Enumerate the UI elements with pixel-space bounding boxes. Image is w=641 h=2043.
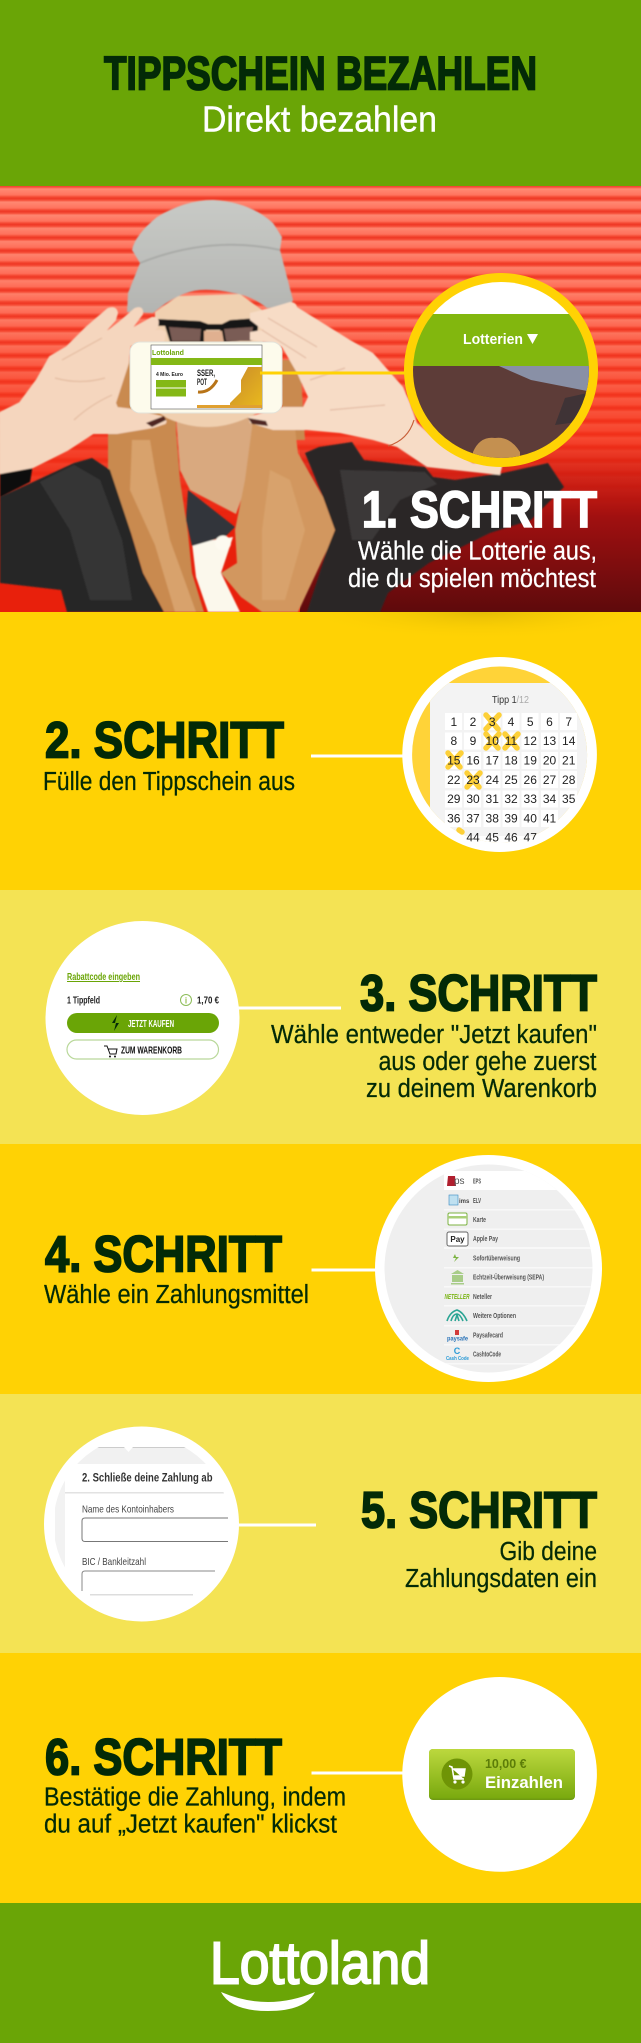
selected number crosses	[448, 715, 518, 832]
hair back	[108, 360, 305, 612]
calendar numbers: 41	[543, 812, 556, 826]
band notch	[124, 1447, 133, 1452]
calendar numbers: 31	[486, 792, 499, 806]
calendar numbers: 39	[504, 812, 518, 826]
calendar numbers: 45	[486, 830, 499, 844]
calendar numbers: 7	[565, 715, 572, 729]
calendar numbers: 9	[470, 734, 477, 748]
icon: paysafe	[447, 1330, 469, 1342]
calendar numbers: 6	[546, 715, 553, 729]
phone hero text: SSER,	[197, 368, 215, 378]
calendar numbers: 4	[508, 715, 515, 729]
buy button	[67, 1013, 219, 1033]
beanie	[127, 200, 293, 313]
row labels: CashtoCode	[473, 1350, 501, 1358]
icon: eps	[447, 1176, 465, 1187]
calendar numbers: 28	[562, 773, 576, 787]
calendar numbers: 22	[447, 773, 461, 787]
calendar numbers: 35	[562, 792, 576, 806]
calendar numbers: 16	[466, 754, 480, 768]
row labels: Paysafecard	[473, 1330, 503, 1340]
panel: step 3	[0, 890, 641, 1144]
divider	[65, 1492, 230, 1494]
row labels: EPS	[473, 1176, 481, 1186]
panel: header	[0, 0, 641, 186]
jacket right	[305, 442, 564, 612]
calendar numbers: 38	[486, 812, 499, 826]
phone hero swoosh	[198, 380, 217, 392]
step 3 text	[271, 1021, 597, 1103]
panel: step 4	[0, 1144, 641, 1394]
magnifier label: Lotterien	[463, 331, 523, 348]
phone	[130, 342, 282, 413]
calendar numbers	[447, 715, 576, 844]
line item: 1 Tippfeld	[67, 996, 100, 1006]
discount link: Rabattcode eingeben	[67, 972, 140, 983]
icon: paysafe: paysafe	[447, 1336, 469, 1342]
calendar numbers: 24	[486, 773, 499, 787]
button	[215, 536, 231, 550]
panel: step 5	[0, 1394, 641, 1653]
checkout circle	[46, 921, 240, 1115]
neck and chest	[176, 415, 258, 514]
calendar numbers: 19	[524, 754, 537, 768]
amount: 10,00 €	[485, 1756, 526, 1771]
calendar numbers: 15	[447, 754, 461, 768]
icon: sofort bolt	[453, 1254, 459, 1262]
calendar numbers: 37	[466, 812, 480, 826]
calendar numbers: 33	[524, 792, 537, 806]
magnifier arrow	[527, 334, 538, 344]
calendar numbers: 14	[562, 734, 576, 748]
calendar numbers: 11	[505, 734, 518, 748]
row labels	[473, 1176, 544, 1358]
phone jackpot: 4 Mio. Euro	[156, 372, 183, 378]
calendar numbers: 2	[470, 715, 477, 729]
left sleeve cuff	[0, 464, 33, 497]
connector line	[312, 1268, 376, 1272]
panel: step 1 photo	[0, 186, 641, 612]
icon: apple pay	[447, 1232, 468, 1246]
magnifier circle	[404, 273, 598, 467]
calendar numbers: 47	[524, 830, 537, 844]
icon: elv	[449, 1195, 470, 1205]
phone bottom bar	[197, 405, 262, 408]
icon: more options	[447, 1310, 467, 1321]
buy button: JETZT KAUFEN	[128, 1019, 174, 1030]
calendar numbers: 26	[524, 773, 537, 787]
step 5 heading: 5. SCHRITT	[361, 1482, 597, 1538]
row labels: Sofortüberweisung	[473, 1254, 520, 1262]
calendar numbers: 5	[527, 715, 534, 729]
logo smile	[221, 1992, 315, 2011]
step 5 text	[405, 1538, 597, 1593]
step 3 text: aus oder gehe zuerst	[378, 1048, 596, 1076]
icon: apple pay: Pay	[450, 1235, 465, 1244]
step 5 text: Gib deine	[500, 1538, 597, 1566]
beanie fold	[140, 245, 280, 263]
hair front right	[221, 420, 335, 612]
calendar numbers: 21	[562, 754, 576, 768]
nails	[146, 416, 268, 427]
calendar numbers: 25	[504, 773, 518, 787]
calendar numbers: 10	[486, 734, 499, 748]
calendar numbers: 23	[466, 773, 480, 787]
left hand creases	[55, 338, 112, 420]
calendar numbers: 20	[543, 754, 556, 768]
icon: cash to code	[446, 1346, 469, 1362]
hair highlight	[130, 440, 305, 612]
number cells	[445, 713, 577, 827]
row separators	[444, 1209, 594, 1364]
calendar numbers: 34	[543, 792, 556, 806]
form label: BIC / Bankleitzahl	[82, 1556, 146, 1568]
icon: bank	[451, 1270, 464, 1284]
payment methods circle	[375, 1155, 602, 1382]
step 3 heading: 3. SCHRITT	[360, 964, 597, 1022]
step 2 text: Fülle den Tippschein aus	[43, 768, 295, 796]
jacket left highlight	[40, 465, 132, 600]
step 3 text: Wähle entweder "Jetzt kaufen"	[271, 1021, 597, 1049]
step 1 text: die du spielen möchtest	[348, 565, 596, 593]
price: 1,70 €	[197, 994, 219, 1006]
logo wordmark: Lottoland	[210, 1930, 430, 1996]
calendar numbers: 13	[543, 734, 556, 748]
selected row	[444, 1171, 594, 1190]
connector line	[312, 1772, 404, 1774]
calendar numbers: 30	[466, 792, 480, 806]
row labels: Neteller	[473, 1292, 492, 1301]
calendar numbers: 44	[466, 830, 480, 844]
icon: card	[448, 1213, 467, 1225]
panel: step 6	[0, 1653, 641, 1903]
icon: cash to code: C	[454, 1346, 461, 1356]
jacket right highlight	[340, 470, 437, 540]
calendar numbers: 27	[543, 773, 556, 787]
calendar title: Tipp 1/12	[492, 694, 529, 706]
form circle	[44, 1426, 239, 1622]
input 2	[82, 1571, 215, 1591]
calendar numbers: 29	[447, 792, 461, 806]
info icon: i	[185, 996, 187, 1006]
calendar circle	[402, 657, 600, 856]
wristband	[388, 420, 414, 446]
subtitle: Direkt bezahlen	[202, 98, 437, 140]
step 4 text: Wähle ein Zahlungsmittel	[44, 1281, 309, 1309]
step 1 text: Wähle die Lotterie aus,	[358, 538, 597, 566]
calendar numbers: 8	[450, 734, 457, 748]
row labels: Weitere Optionen	[473, 1311, 516, 1320]
deposit button	[429, 1749, 575, 1800]
button circle	[402, 1677, 597, 1872]
connector line	[260, 372, 405, 374]
red striped wall	[0, 186, 641, 612]
calendar numbers: 1	[450, 715, 457, 729]
basket button: ZUM WARENKORB	[121, 1046, 182, 1056]
step 6 text: du auf „Jetzt kaufen" klickst	[44, 1810, 337, 1838]
calendar numbers: 12	[524, 734, 537, 748]
right hand	[248, 302, 503, 475]
step 6 text: Bestätige die Zahlung, indem	[44, 1784, 346, 1812]
icon: eps: ps	[454, 1176, 465, 1187]
connector line	[311, 754, 404, 758]
icon: cash to code: Cash Code	[446, 1356, 469, 1362]
left hand	[0, 308, 166, 473]
icon: cart	[442, 1758, 472, 1790]
jacket left	[0, 458, 164, 612]
icon: elv: ims	[459, 1199, 470, 1205]
calendar numbers: 36	[447, 812, 461, 826]
phone hero text 2: POT	[197, 377, 207, 387]
phone offer tiles	[156, 380, 186, 396]
panel: footer	[0, 1903, 641, 2043]
icon: neteller: NETELLER	[444, 1294, 470, 1301]
phone screen	[151, 345, 262, 409]
form bottom rule	[90, 1594, 193, 1596]
step 1 heading: 1. SCHRITT	[362, 481, 597, 538]
calendar numbers: 3	[489, 715, 496, 729]
row labels: Karte	[473, 1215, 486, 1224]
calendar numbers: 32	[504, 792, 518, 806]
row labels: Apple Pay	[473, 1234, 499, 1243]
title: TIPPSCHEIN BEZAHLEN	[104, 46, 537, 100]
row labels: Echtzeit-Überweisung (SEPA)	[473, 1272, 544, 1282]
form label: Name des Kontoinhabers	[82, 1504, 174, 1516]
step 4 heading: 4. SCHRITT	[45, 1226, 282, 1282]
form heading: 2. Schließe deine Zahlung ab	[82, 1472, 212, 1484]
calendar numbers: 18	[504, 754, 518, 768]
shirt	[192, 537, 240, 612]
connector line	[238, 1524, 316, 1526]
left strip	[55, 1464, 65, 1604]
face	[155, 294, 264, 427]
basket button	[67, 1040, 218, 1059]
panel: step 2	[0, 584, 641, 890]
form top band	[55, 1447, 230, 1464]
collar	[186, 490, 235, 546]
input 1	[82, 1518, 228, 1542]
step 6 text	[44, 1784, 346, 1838]
button label: Einzahlen	[485, 1773, 563, 1792]
calendar numbers: 46	[504, 830, 518, 844]
phone lion	[230, 367, 262, 405]
glasses	[157, 318, 258, 343]
info icon	[180, 994, 192, 1006]
phone logo: Lottoland	[152, 350, 184, 357]
woman	[0, 200, 564, 612]
step 5 text: Zahlungsdaten ein	[405, 1565, 597, 1593]
step 6 heading: 6. SCHRITT	[45, 1728, 282, 1786]
calendar numbers: 40	[524, 812, 537, 826]
step 1 text	[348, 538, 597, 593]
connector line	[238, 1006, 341, 1010]
step 3 text: zu deinem Warenkorb	[366, 1075, 597, 1103]
row labels: ELV	[473, 1196, 482, 1205]
step 2 heading: 2. SCHRITT	[45, 712, 284, 768]
phone nav	[151, 358, 262, 365]
right hand creases	[262, 318, 385, 410]
calendar numbers: 17	[486, 754, 499, 768]
